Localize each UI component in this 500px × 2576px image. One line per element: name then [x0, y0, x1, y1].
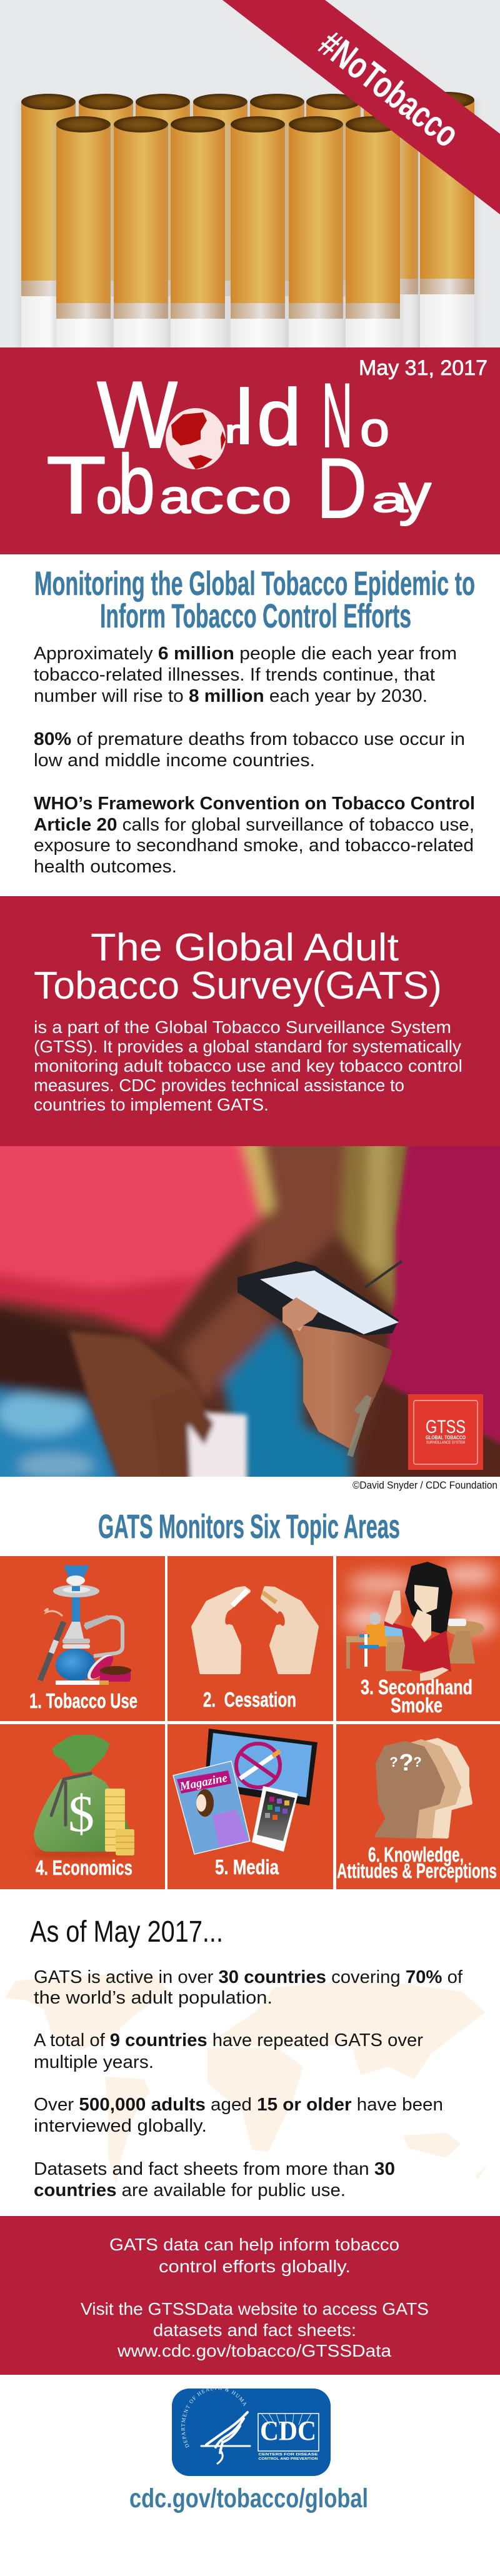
title line: Tobacco Day: D [298, 441, 367, 536]
heading: monitoring [34, 565, 475, 635]
CDC mark [258, 2414, 319, 2461]
logo: GTSS: GTSS [426, 1417, 466, 1437]
heading: as of May 2017: As of May 2017... [30, 1915, 223, 1949]
footer url: cdc.gov/tobacco/global [129, 2484, 368, 2514]
icon: three head silhouettes [377, 1740, 471, 1837]
text block: GATS description: measures. CDC provides technical assistance to [34, 1076, 404, 1095]
text block: tobacco facts: low and middle income countries. [34, 751, 315, 771]
text block: tobacco facts: health outcomes. [34, 857, 177, 877]
back row of cigarettes [18, 92, 478, 359]
title line: World No: d [257, 373, 301, 462]
icon: three head silhouettes: ? [413, 1754, 422, 1770]
title line: Tobacco Day: o [262, 471, 291, 524]
text block: GATS statistics: interviewed globally. [34, 2116, 207, 2136]
text block: GATS description [34, 1017, 462, 1114]
panel: World No Tobacco Day banner [0, 347, 500, 554]
photo: person using phone for survey [0, 1146, 500, 1477]
icon: money bag and coins [31, 1735, 134, 1859]
title: The Global Adult Tobacco Survey: The Global Adult [91, 926, 399, 969]
icon: hookah and tobacco products [40, 1565, 131, 1685]
title: The Global Adult Tobacco Survey [34, 926, 442, 1007]
icon: three head silhouettes: ? [399, 1750, 414, 1776]
text block: GATS statistics: the world’s adult population. [34, 1988, 272, 2008]
text block: GATS statistics: A total of 9 countries have repeated GATS over [34, 2030, 423, 2050]
icon: woman in smoky office [344, 1562, 497, 1681]
label: 1. Tobacco Use [29, 1689, 138, 1712]
icon: three head silhouettes: ? [389, 1754, 398, 1770]
title line: Tobacco Day: c [225, 471, 261, 524]
CDC mark: CENTERS FOR DISEASE [259, 2453, 318, 2457]
text block: GATS description: is a part of the Global Tobacco Surveillance System [34, 1017, 451, 1037]
panel: call to action: Visit the GTSSData website to access GATS [81, 2299, 429, 2319]
CDC mark: CONTROL AND PREVENTION [259, 2457, 318, 2461]
title line: Tobacco Day: T [46, 439, 106, 531]
title line: Tobacco Day: c [189, 471, 224, 524]
text block: tobacco facts: number will rise to 8 million each year by 2030. [34, 686, 428, 706]
title line: World No: r [225, 414, 240, 450]
front row of cigarettes [51, 116, 406, 347]
HHS seal ring text: DEPARTMENT OF HEALTH & HUMAN SERVICES · USA [181, 2386, 246, 2449]
panel: topic 1 tobacco use [0, 1556, 165, 1721]
text block: tobacco facts: 80% of premature deaths from tobacco use occur in [34, 729, 465, 749]
panel: cigarettes header [0, 0, 500, 381]
background: pale world map [5, 1973, 488, 2185]
HHS eagle [201, 2412, 250, 2464]
panel: topic 6 knowledge [336, 1724, 500, 1889]
panel: call to action: www.cdc.gov/tobacco/GTSSData [117, 2341, 391, 2360]
CDC mark: CDC [260, 2415, 316, 2446]
panel: call to action [0, 2216, 500, 2375]
title line: World No: W [97, 362, 178, 468]
logo: GTSS: GLOBAL TOBACCO [426, 1435, 466, 1440]
panel: GATS intro [0, 896, 500, 1146]
text block: GATS description: monitoring adult tobacco use and key tobacco control [34, 1056, 462, 1076]
label: 2. Cessation [203, 1688, 296, 1711]
title line: World No: o [184, 402, 209, 455]
text block: tobacco facts [34, 644, 475, 877]
icon: tablet, magazine and phone: Magazine [178, 1771, 229, 1794]
logo: GTSS [408, 1394, 483, 1470]
title: The Global Adult Tobacco Survey: Tobacco Survey(GATS) [34, 964, 442, 1007]
text block: GATS statistics: Datasets and fact sheets from more than 30 [34, 2159, 395, 2179]
panel: call to action: datasets and fact sheets: [153, 2320, 356, 2340]
title line: Tobacco Day: y [399, 462, 431, 526]
date: May 31, 2017 [359, 356, 488, 380]
title line: Tobacco Day: a [372, 480, 409, 519]
label: 5. Media [215, 1855, 279, 1879]
text block: GATS statistics: Over 500,000 adults aged 15 or older have been [34, 2095, 443, 2115]
label [361, 1675, 472, 1717]
icon: globe [166, 408, 226, 469]
icon: money bag and coins: $ [68, 1785, 94, 1843]
title line: Tobacco Day: o [96, 471, 122, 524]
icon: tablet, magazine and phone [173, 1729, 318, 1854]
title line: World No: o [360, 401, 389, 456]
panel: topic 2 cessation [168, 1556, 333, 1721]
text block: tobacco facts: Approximately 6 million people die each year from [34, 644, 457, 664]
panel: call to action: GATS data can help inform tobacco [109, 2235, 399, 2254]
text block: GATS statistics: GATS is active in over 30 countries covering 70% of [34, 1967, 463, 1987]
text block: tobacco facts: exposure to secondhand smoke, and tobacco-related [34, 836, 474, 856]
text block: GATS description: (GTSS). It provides a global standard for systematically [34, 1037, 461, 1056]
title line: World No: N [310, 364, 352, 466]
title line: Tobacco Day: a [159, 471, 191, 524]
text block: GATS statistics [34, 1967, 463, 2200]
title line: Tobacco Day: b [118, 438, 155, 531]
logo: HHS and CDC [172, 2386, 331, 2476]
panel: call to action: control efforts globally. [159, 2257, 351, 2276]
text block: tobacco facts: WHO’s Framework Convention on Tobacco Control [34, 794, 475, 814]
text block: GATS statistics: multiple years. [34, 2052, 154, 2072]
panel: topic 5 media [168, 1724, 333, 1889]
text block: GATS description: countries to implement GATS. [34, 1095, 269, 1114]
ribbon: hashtag [222, 0, 500, 214]
text block: tobacco facts: Article 20 calls for global surveillance of tobacco use, [34, 815, 474, 835]
panel: topic 4 economics [0, 1724, 165, 1889]
label [337, 1843, 497, 1882]
text block: tobacco facts: tobacco-related illnesses. If trends continue, that [34, 665, 435, 685]
label: 4. Economics [36, 1856, 132, 1879]
label: Smoke [391, 1694, 442, 1717]
logo: GTSS: SURVEILLANCE SYSTEM [426, 1441, 465, 1445]
icon: hands breaking cigarette [193, 1588, 317, 1672]
panel: topic 3 secondhand smoke [336, 1556, 500, 1721]
text block: GATS statistics: countries are available for public use. [34, 2180, 346, 2200]
title line: World No: l [235, 374, 254, 461]
